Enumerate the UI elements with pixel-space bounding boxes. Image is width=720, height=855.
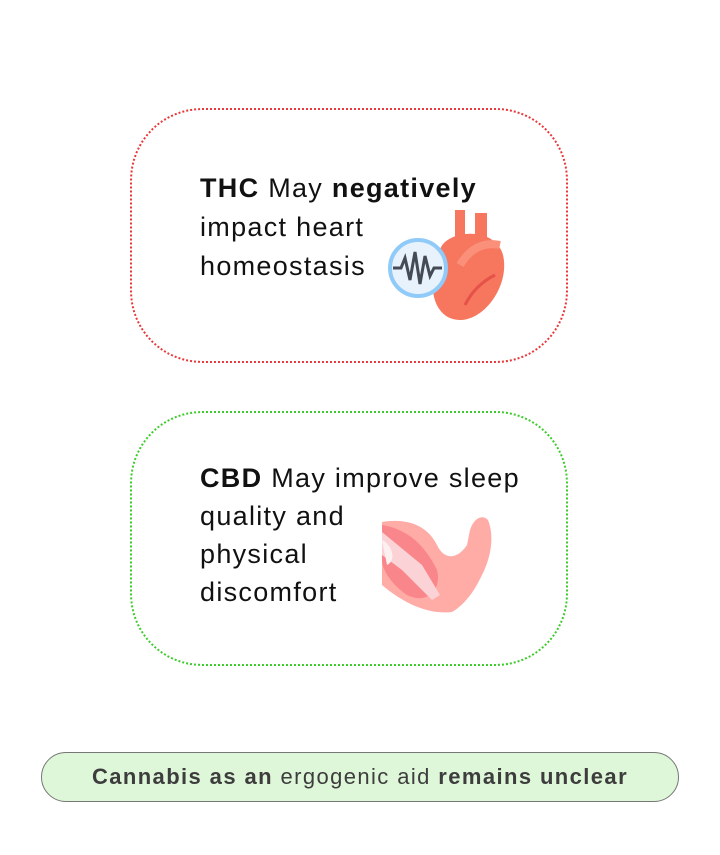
text: THC	[200, 173, 477, 281]
text: THC: impact heart	[200, 212, 364, 242]
panel: CBD	[130, 411, 568, 666]
panel: THC	[130, 108, 568, 363]
text: THC: homeostasis	[200, 251, 366, 281]
banner: conclusion	[41, 752, 679, 802]
text: CBD: discomfort	[200, 577, 338, 607]
icon: heart with pulse	[388, 210, 504, 320]
icon: arm	[382, 517, 492, 612]
text: THC: THC May negatively	[200, 173, 477, 203]
banner: conclusion: Cannabis as an ergogenic aid remains unclear	[92, 764, 628, 789]
text: CBD	[200, 463, 520, 607]
text: CBD: quality and	[200, 501, 345, 531]
text: CBD: CBD May improve sleep	[200, 463, 520, 493]
text: CBD: physical	[200, 539, 308, 569]
